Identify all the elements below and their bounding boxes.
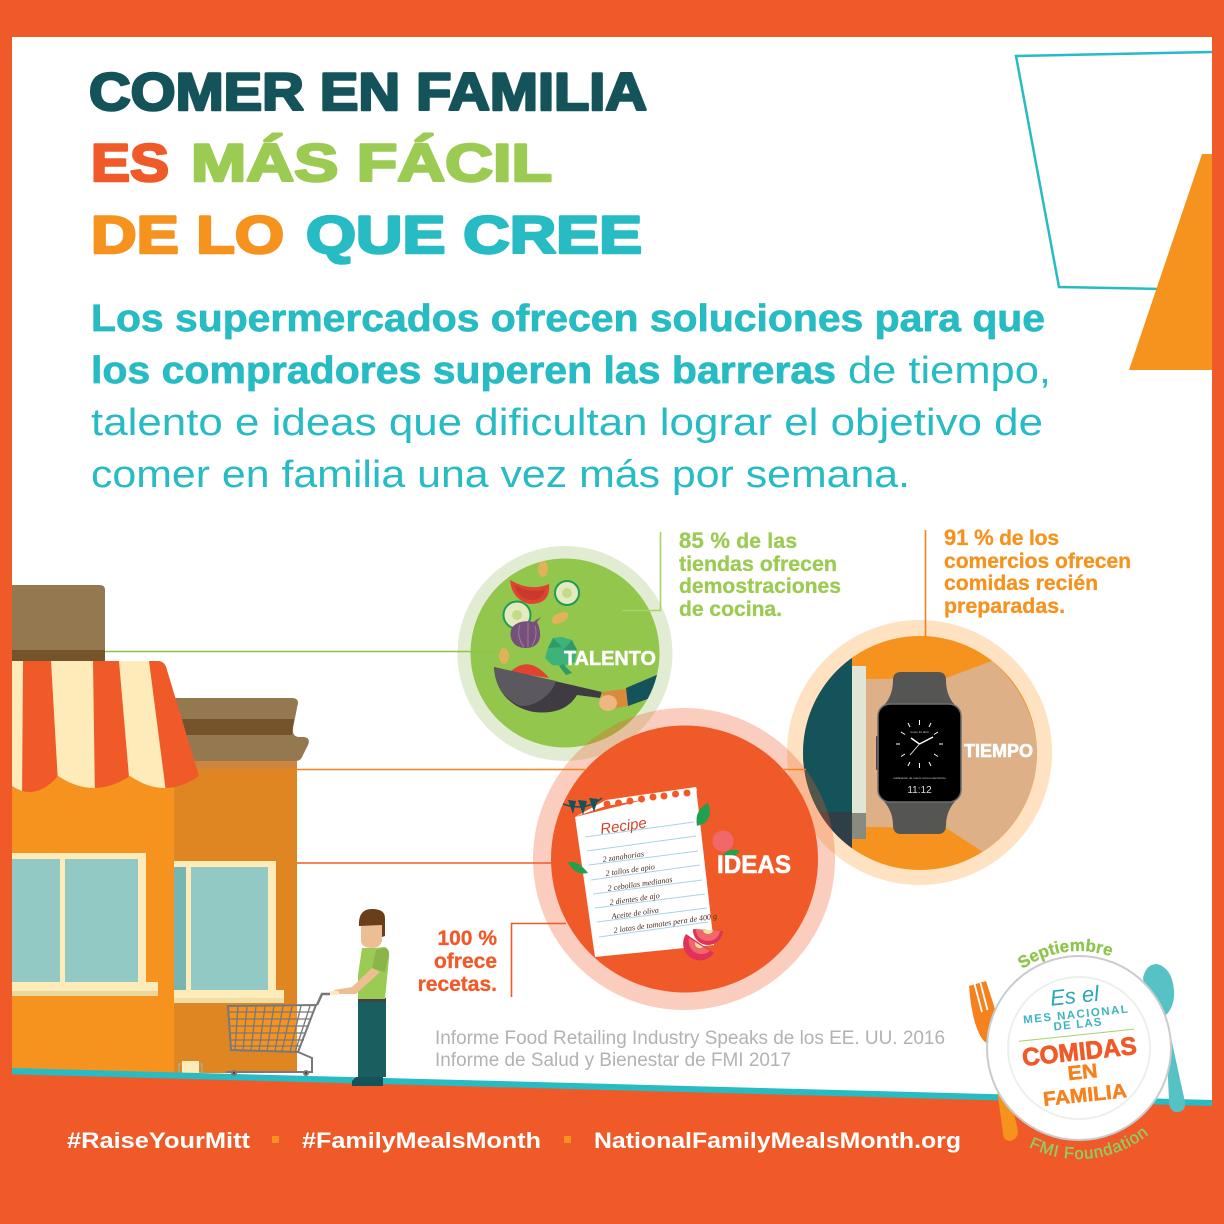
title: ES [91, 134, 169, 193]
badge: family meals month plate: EN [1067, 1060, 1099, 1085]
footer hashtags: NationalFamilyMealsMonth.org [594, 1128, 961, 1153]
sources: Informe de Salud y Bienestar de FMI 2017 [435, 1050, 791, 1071]
intro paragraph: comer en familia una vez más por semana. [91, 454, 910, 496]
label: talento: TALENTO [564, 648, 656, 670]
intro paragraph [91, 298, 1051, 496]
footer hashtags: #RaiseYourMitt [67, 1128, 251, 1153]
callout line: ideas [512, 924, 566, 997]
badge: family meals month plate [969, 938, 1185, 1160]
label: tiempo: TIEMPO [964, 741, 1033, 761]
callout line: talento [622, 532, 660, 610]
footer hashtags: #FamilyMealsMonth [302, 1128, 541, 1153]
circle: ideas [533, 708, 835, 1010]
decorative teal outline and orange trapezoid [1016, 52, 1212, 370]
badge: family meals month plate: FAMILIA [1042, 1080, 1128, 1111]
callout text: 85 % [679, 528, 841, 621]
title: DE LO [91, 206, 284, 265]
callout text: 91 % [944, 525, 1131, 618]
callout text: 85 %: de cocina. [679, 598, 782, 621]
tomato wedges [693, 929, 723, 945]
right window [174, 861, 276, 991]
callout text: 91 %: comercios ofrecen [944, 550, 1131, 573]
recipe note illustration: 2 tallos de apio [605, 862, 655, 878]
watch face [896, 720, 943, 768]
recipe note illustration [563, 787, 740, 960]
recipe note illustration: 2 latas de tomates pera de 400 g [613, 912, 717, 935]
shopper figure [330, 909, 389, 1086]
recipe note illustration: 2 zanahorias [602, 849, 644, 864]
intro paragraph: talento e ideas que dificultan lograr el objetivo de [91, 402, 1043, 444]
right building [174, 761, 297, 1073]
left building [12, 760, 174, 1073]
circle: talento [458, 546, 672, 761]
recipe note illustration: Recipe [599, 815, 648, 838]
recipe note illustration: 2 cebollas medianas [607, 875, 673, 893]
spoon [1143, 964, 1185, 1112]
badge: family meals month plate: DE LAS [1053, 1017, 1102, 1033]
intro paragraph: los compradores superen las barreras [91, 350, 836, 392]
circle: tiempo [787, 620, 1052, 885]
small basket on ground [179, 1064, 202, 1073]
footer hashtags [67, 1128, 961, 1153]
callout text: 100 %: ofrece [434, 950, 497, 973]
circle: tiempo: 11:12 [907, 785, 932, 796]
callout text: 91 %: comidas recién [944, 572, 1098, 595]
callout text: 85 %: 85 % de las [679, 528, 797, 553]
recipe note illustration: 2 dientes de ajo [609, 891, 660, 907]
circle: tiempo: notificación de nuevo correo electrónico [893, 776, 946, 780]
badge: family meals month plate: FMI Foundation [1030, 1128, 1148, 1160]
circle: tiempo: lunes 12 abril [911, 730, 929, 734]
callout line: tiempo [924, 530, 926, 637]
callout text: 91 %: 91 % de los [944, 525, 1059, 550]
title: MÁS FÁCIL [191, 133, 552, 193]
store illustration [12, 585, 309, 1073]
shopping cart [226, 994, 330, 1075]
callout text: 85 %: demostraciones [679, 575, 841, 598]
badge: family meals month plate: MES NACIONAL [1023, 1004, 1128, 1027]
callout text: 100 % [418, 927, 497, 996]
callout text: 85 %: tiendas ofrecen [679, 553, 837, 576]
intro paragraph: de tiempo, [848, 350, 1051, 392]
intro paragraph: Los supermercados ofrecen soluciones para que [91, 298, 1045, 340]
badge: family meals month plate: Septiembre [1018, 938, 1112, 968]
badge: family meals month plate: Es el [1049, 981, 1101, 1011]
left window [12, 853, 146, 983]
title: COMER EN FAMILIA [89, 63, 647, 122]
ground strip [0, 1068, 1224, 1224]
badge: family meals month plate: COMIDAS [1021, 1032, 1138, 1072]
recipe note illustration: Aceite de oliva [610, 905, 659, 921]
connector lines from store to circles [105, 652, 806, 863]
sources: Informe Food Retailing Industry Speaks de los EE. UU. 2016 [435, 1028, 945, 1049]
right roof [170, 698, 309, 761]
awning [12, 661, 199, 792]
label: ideas: IDEAS [717, 851, 791, 879]
wrist and smartwatch illustration [803, 658, 1037, 852]
title [89, 63, 647, 265]
fork [969, 981, 1018, 1141]
callout text: 100 %: recetas. [418, 973, 497, 996]
sources [435, 1028, 945, 1071]
salad and wok illustration [494, 561, 659, 712]
title: QUE CREE [306, 206, 642, 265]
callout text: 100 %: 100 % [437, 927, 497, 950]
callout text: 91 %: preparadas. [944, 595, 1065, 618]
